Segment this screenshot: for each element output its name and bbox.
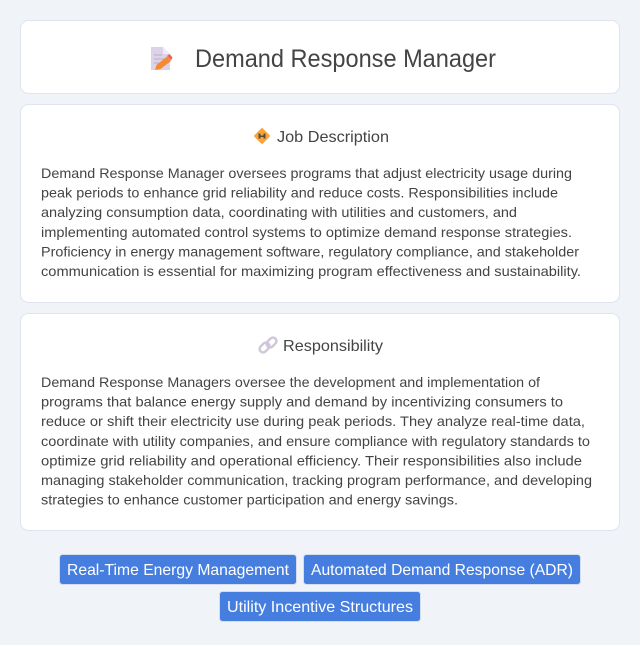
- text block: responsibility: programs that balance energy supply and demand by incentivizing consumers to: [41, 394, 563, 410]
- icon: chain link: [258, 336, 278, 354]
- text block: responsibility: reduce or shift their electricity use during peak periods. They analyze real-time data,: [41, 413, 585, 429]
- text block: responsibility: Demand Response Managers oversee the development and implementation of: [41, 374, 540, 390]
- text block: job description: [41, 165, 581, 279]
- text block: responsibility: managing stakeholder communication, tracking program performance, and developing: [41, 472, 592, 488]
- icon: document with pencil: [151, 47, 172, 70]
- text block: job description: Proficiency in energy management software, regulatory compliance, and stakeholder: [41, 243, 579, 259]
- text block: responsibility: optimize grid reliability and operational efficiency. Their responsibilities also include: [41, 452, 582, 468]
- text block: job description: communication is essential for maximizing program effectiveness and sustainability.: [41, 263, 581, 279]
- heading: responsibility: Responsibility: [283, 338, 383, 355]
- tag: real-time energy management: [60, 554, 296, 584]
- text block: responsibility: strategies to enhance customer participation and energy savings.: [41, 492, 458, 508]
- heading: job description: Job Description: [277, 129, 389, 146]
- text block: job description: analyzing consumption data, coordinating with utilities and customers, and: [41, 204, 517, 220]
- tag: automated demand response: [304, 554, 580, 584]
- panel: responsibility: [20, 314, 620, 530]
- text block: job description: peak periods to enhance grid reliability and reduce costs. Responsibilities include: [41, 185, 558, 201]
- text block: responsibility: coordinate with utility companies, and ensure compliance with regulatory standards to: [41, 433, 590, 449]
- tag: utility incentive structures: Utility Incentive Structures: [227, 599, 413, 616]
- icon: construction diamond: [254, 128, 270, 144]
- tag: real-time energy management: Real-Time Energy Management: [67, 562, 290, 579]
- text block: responsibility: [41, 374, 592, 508]
- text block: job description: Demand Response Manager oversees programs that adjust electricity usage during: [41, 165, 572, 181]
- text block: job description: implementing automated control systems to optimize demand response strategies.: [41, 224, 572, 240]
- panel: job description: [20, 104, 620, 302]
- tag: utility incentive structures: [220, 592, 420, 622]
- panel: title card: [20, 20, 620, 94]
- tag: automated demand response: Automated Demand Response (ADR): [311, 562, 573, 579]
- title: Demand Response Manager: [195, 45, 496, 73]
